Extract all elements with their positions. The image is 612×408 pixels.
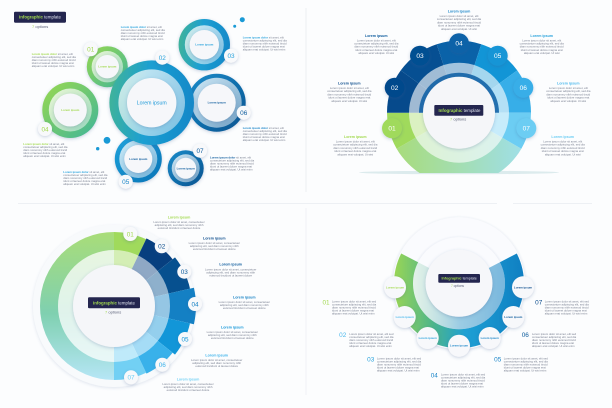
text 07: aliquam erat volutpat. Ut wisi enim [210, 168, 253, 172]
text 03: consectetuer adipiscing elit, sed dia [243, 38, 287, 42]
text 06: aliquam erat volutpat. Ut wisi [550, 99, 587, 103]
text 02: Lorem ipsum [338, 82, 361, 86]
text 06: Lorem ipsum dolor sit amet, elit [549, 86, 588, 90]
text 02: euismod tincidunt ut laoreet dolore [193, 247, 236, 251]
item 07: aliquam erat volutpat. Ut wisi enim [545, 312, 588, 316]
number badges: 01 [127, 231, 134, 238]
text 06 [191, 354, 242, 368]
bubbles: Lorem ipsum [419, 336, 437, 340]
center disc [73, 265, 155, 347]
item 03: aliquam erat volutpat. Ut wisi enim [377, 369, 420, 373]
text 07: diam nonummy nibh euismod tincid [210, 162, 254, 166]
text 05: Lorem ipsum dolor sit amet, consectetuer [207, 330, 258, 334]
number badges: 03 [227, 53, 235, 60]
number badges: 07 [127, 375, 135, 382]
circle 07: Lorem ipsum [177, 166, 195, 170]
text 04: Lorem ipsum [233, 295, 256, 299]
text 05: idunt ut laoreet dolore magna erat [63, 179, 106, 183]
title label [438, 274, 480, 283]
item 02 [339, 332, 394, 348]
text 01: consectetuer adipiscing elit, sed dia [32, 55, 76, 59]
text 07: Lorem ipsum dolor sit amet, elit [543, 140, 582, 144]
decorative dots [96, 17, 245, 150]
text 03: Lorem ipsum [365, 34, 388, 38]
text 06: sit amet, elit [269, 126, 284, 130]
panel: bubble circles [14, 8, 592, 204]
item 06 [522, 332, 577, 348]
item 05: consectetuer adipiscing elit, sed dia [504, 360, 548, 364]
number bubbles: 02 [391, 85, 399, 92]
text 06 [546, 82, 591, 103]
circle 05 [115, 136, 162, 182]
bubbles: Lorem ipsum [450, 344, 469, 348]
text 02: consectetuer adipiscing elit, sed dia [121, 28, 165, 32]
number bubbles: 03 [416, 53, 424, 60]
item 01: diam nonummy nibh euismod tincid [332, 306, 376, 310]
text 02: idunt ut laoreet dolore magna erat [121, 34, 163, 38]
text 07: Lorem ipsum dolor sit amet, consectetuer [162, 382, 214, 386]
item 03: 03 [367, 357, 375, 364]
title label: Infographic template [442, 277, 477, 281]
item 01: 01 [322, 299, 330, 306]
text 07: aliquam erat volutpat. Ut wisi [545, 152, 581, 156]
text 03: euismod tincidunt ut laoreet dolore [209, 274, 253, 278]
text 05: aliquam erat volutpat. Ut wisi enim [63, 182, 107, 186]
text 01: diam nonummy nibh euismod tincid [32, 58, 76, 62]
number bubbles [382, 33, 536, 138]
options label: 7 options [451, 284, 464, 288]
item 07: idunt ut laoreet dolore magna erat [545, 308, 587, 312]
item 03: Lorem ipsum dolor sit amet, elit sed [377, 357, 422, 361]
text 01 [153, 215, 205, 230]
translucent inner band [413, 262, 505, 329]
text 02: Lorem ipsum [203, 236, 226, 240]
text 06: Lorem ipsum [557, 82, 580, 86]
number bubbles: 04 [455, 41, 463, 48]
text 03: adipiscing elit, sed diam nonummy nibh [206, 270, 256, 274]
text 04: idunt ut laoreet dolore magna erat [23, 151, 66, 155]
text 05: Lorem ipsum [221, 325, 244, 329]
text 01: idunt ut laoreet dolore magna erat [32, 61, 74, 65]
text 02: diam nonummy nibh euismod tincid [121, 31, 165, 35]
number badges [38, 42, 251, 189]
item 01: idunt ut laoreet dolore magna erat [332, 308, 374, 312]
text 05 [207, 325, 258, 340]
text 02: adipiscing elit, sed diam nonummy nibh [190, 244, 239, 248]
item 03: diam nonummy nibh euismod tincid [377, 363, 421, 367]
circle 03: Lorem ipsum [195, 43, 214, 47]
item 01: Lorem ipsum dolor sit amet, elit sed [332, 300, 377, 304]
number badges: 03 [181, 269, 188, 276]
bubbles: Lorem ipsum [514, 285, 533, 289]
text 03: Lorem ipsum dolor sit amet, elit [357, 38, 396, 42]
wheel center disc [423, 77, 495, 149]
bubbles: Lorem ipsum [481, 336, 499, 340]
text 04 [437, 10, 482, 31]
wheel segments [387, 41, 531, 185]
text 07: consectetuer adipiscing elit, sed dia [541, 143, 585, 147]
translucent ring left [58, 250, 114, 362]
text 07: idunt ut laoreet dolore magna erat [542, 149, 584, 153]
item 06: Lorem ipsum dolor sit amet, elit sed [532, 332, 577, 336]
text 04 [219, 295, 270, 310]
text 04: sit amet, elit [49, 142, 64, 146]
item 04: consectetuer adipiscing elit, sed dia [441, 376, 486, 380]
item 02: 02 [339, 332, 347, 339]
item 04 [431, 372, 486, 389]
title label [434, 105, 483, 116]
circle 05: Lorem ipsum [129, 157, 148, 161]
vertical divider [305, 208, 307, 395]
text 01: Lorem ipsum [168, 215, 190, 219]
item 06: idunt ut laoreet dolore magna erat [532, 341, 574, 345]
faint mid disc [413, 237, 505, 329]
text 05: consectetuer adipiscing elit, sed dia [63, 173, 108, 177]
text 01: sit amet, elit [58, 52, 73, 56]
text 05 [520, 34, 564, 55]
text 05: Lorem ipsum dolor sit amet, elit [522, 38, 561, 42]
text 05: consectetuer adipiscing elit, sed dia [520, 42, 564, 46]
text 07: euismod tincidunt ut laoreet dolore [167, 388, 210, 392]
faint outer halo [33, 225, 195, 387]
number badges: 01 [87, 47, 95, 54]
number badges: 04 [41, 126, 49, 133]
translucent ring right [58, 250, 170, 362]
item 07: diam nonummy nibh euismod tincid [545, 306, 589, 310]
text 01: Lorem ipsum [344, 135, 367, 139]
text 03: idunt ut laoreet dolore magna erat [243, 44, 285, 48]
item 01: consectetuer adipiscing elit, sed dia [332, 302, 377, 306]
text 07: sit amet, elit [236, 156, 251, 160]
text 02: aliquam erat volutpat. Ut wisi enim [121, 37, 164, 41]
text 04: consectetuer adipiscing elit, sed dia [437, 17, 482, 21]
text 04: diam nonummy nibh euismod tincid [23, 148, 68, 152]
text 01: euismod tincidunt ut laoreet dolore [158, 226, 201, 230]
item 03: consectetuer adipiscing elit, sed dia [377, 360, 422, 364]
text 03: aliquam erat volutpat. Ut wisi [358, 51, 395, 55]
panel: arc with bubbles [306, 208, 589, 395]
number bubbles: 05 [494, 53, 502, 60]
center disc [426, 250, 492, 317]
item 05: Lorem ipsum dolor sit amet, elit sed [504, 357, 548, 361]
number badges: 07 [196, 148, 204, 155]
panel divider lines [18, 8, 592, 204]
bubbles: Lorem ipsum [396, 315, 414, 319]
text 04: adipiscing elit, sed diam nonummy nibh [220, 303, 269, 307]
circle 03 [179, 19, 230, 70]
faint outer disc [393, 217, 525, 349]
text 05: aliquam erat volutpat. Ut wisi [524, 51, 560, 55]
text 03: diam nonummy nibh euismod tincid [243, 42, 287, 46]
text 07: diam nonummy nibh euismod tincid [541, 146, 585, 150]
circle 07 [168, 150, 204, 186]
wheel translucent ring [409, 63, 509, 163]
text 02 [189, 236, 240, 251]
text 02 [327, 82, 372, 103]
item 04: Lorem ipsum dolor sit amet, elit sed [441, 373, 486, 377]
text 07: adipiscing elit, sed diam nonummy nibh [164, 385, 213, 389]
text 02: diam nonummy nibh euismod tincid [327, 92, 372, 96]
circle 04 [42, 82, 98, 138]
item 05: 05 [494, 357, 502, 364]
text 02: Lorem ipsum dolor sit amet, elit [330, 86, 369, 90]
text 06: idunt ut laoreet dolore magna erat [243, 135, 285, 139]
text 06: Lorem ipsum [205, 354, 228, 358]
item 04: diam nonummy nibh euismod tincid [441, 379, 485, 383]
text 01: consectetuer adipiscing elit, sed dia [333, 143, 378, 147]
text 07: Lorem ipsum dolor [210, 156, 236, 160]
item 02: idunt ut laoreet dolore magna erat [349, 341, 392, 345]
options label: 7 options [450, 116, 466, 122]
text 06: diam nonummy nibh euismod tincid [243, 132, 287, 136]
text 05: adipiscing elit, sed diam nonummy nibh [208, 333, 257, 337]
number badges [123, 227, 202, 384]
text 07: consectetuer adipiscing elit, sed dia [210, 158, 255, 162]
text 01: aliquam erat volutpat. Ut wisi enim [32, 64, 75, 68]
circle 06: Lorem ipsum [208, 101, 226, 105]
text 04: idunt ut laoreet dolore magna erat [438, 24, 480, 28]
text 03: consectetuer adipiscing elit, sed dia [354, 42, 399, 46]
item 07 [535, 299, 589, 316]
item 04: aliquam erat volutpat. Ut wisi enim [441, 385, 484, 389]
text 03: diam nonummy nibh euismod tincid [354, 45, 399, 49]
text 04: consectetuer adipiscing elit, sed dia [23, 145, 68, 149]
text 07 [541, 135, 585, 156]
left half gradient [40, 232, 114, 380]
title label [14, 12, 66, 23]
item 03: idunt ut laoreet dolore magna erat [377, 366, 419, 370]
text 04: aliquam erat volutpat. Ut wisi enim [23, 154, 67, 158]
number bubbles: 01 [388, 126, 396, 133]
text 02: consectetuer adipiscing elit, sed dia [327, 89, 372, 93]
item 01 [322, 299, 377, 316]
text 01: adipiscing elit, sed diam nonummy nibh [155, 223, 204, 227]
text 04: Lorem ipsum dolor sit amet, elit [440, 14, 479, 18]
number badges: 05 [122, 179, 130, 186]
number badges: 06 [240, 110, 248, 117]
text 04: euismod tincidunt ut laoreet dolore [223, 306, 266, 310]
number bubbles: 06 [520, 85, 527, 92]
circle 01 [87, 46, 128, 87]
item 02: aliquam erat volutpat. Ut wisi enim [349, 344, 393, 348]
item 07: 07 [535, 299, 543, 306]
text 02: Lorem ipsum dolor [121, 25, 147, 29]
circle 04: Lorem ipsum [61, 108, 80, 112]
text 03: Lorem ipsum dolor [243, 36, 269, 40]
title label [88, 297, 140, 308]
text 07 [162, 377, 214, 392]
item 01: aliquam erat volutpat. Ut wisi enim [332, 312, 375, 316]
text 03 [354, 34, 399, 55]
text 06: diam nonummy nibh euismod tincid [546, 92, 591, 96]
circle 06 [188, 74, 246, 132]
text 02: aliquam erat volutpat. Ut wisi [331, 99, 368, 103]
item 06: diam nonummy nibh euismod tincid [532, 338, 576, 342]
number badges: 02 [158, 244, 166, 251]
text 05: Lorem ipsum [530, 34, 553, 38]
fan segments [114, 232, 196, 380]
text 03: idunt ut laoreet dolore magna erat [355, 48, 398, 52]
text 04: Lorem ipsum [448, 10, 470, 14]
text 03: Lorem ipsum [219, 263, 242, 267]
text 01: diam nonummy nibh euismod tincid [333, 146, 378, 150]
text 06: Lorem ipsum dolor sit amet, consectetuer [191, 358, 242, 362]
item 06: aliquam erat volutpat. Ut wisi enim [532, 344, 575, 348]
text 05: diam nonummy nibh euismod tincid [63, 176, 108, 180]
item 05: diam nonummy nibh euismod tincid [504, 363, 548, 367]
text 04: diam nonummy nibh euismod tincid [437, 20, 481, 24]
bubbles: Lorem ipsum [386, 285, 405, 289]
wheel inner dark ring [419, 73, 499, 113]
number badges: 04 [191, 301, 199, 308]
text 03: Lorem ipsum dolor sit amet, consectetuer [205, 267, 256, 271]
item 03 [367, 357, 422, 373]
text 03: aliquam erat volutpat. Ut wisi enim [243, 48, 286, 52]
text 05: Lorem ipsum dolor [63, 170, 90, 174]
text 04: aliquam erat volutpat. Ut wisi [441, 27, 477, 31]
text 04: Lorem ipsum dolor [23, 142, 50, 146]
text 06: adipiscing elit, sed diam nonummy nibh [192, 361, 242, 365]
gradient band [394, 254, 524, 348]
text 01: idunt ut laoreet dolore magna erat [334, 149, 377, 153]
item 05: idunt ut laoreet dolore magna erat [504, 366, 546, 370]
item 05 [494, 357, 548, 373]
panel: fan chart [33, 215, 270, 392]
text 07: idunt ut laoreet dolore magna erat [210, 164, 252, 168]
text 02: idunt ut laoreet dolore magna erat [328, 96, 371, 100]
item 02: consectetuer adipiscing elit, sed dia [349, 335, 394, 339]
number badges: 02 [159, 55, 166, 62]
circle 02: Lorem ipsum [137, 100, 167, 106]
text 02: sit amet, elit [147, 25, 162, 29]
title label: Infographic template [93, 300, 136, 305]
text 05: idunt ut laoreet dolore magna erat [521, 48, 563, 52]
item 04: idunt ut laoreet dolore magna erat [441, 382, 483, 386]
options label: 7 options [105, 310, 121, 314]
text 06: consectetuer adipiscing elit, sed dia [243, 129, 287, 133]
text 05: diam nonummy nibh euismod tincid [520, 45, 564, 49]
number badges: 06 [159, 362, 166, 369]
text 01: Lorem ipsum dolor [32, 52, 58, 56]
item 06: consectetuer adipiscing elit, sed dia [532, 335, 577, 339]
item 04: 04 [431, 372, 438, 379]
panel: gear wheel [327, 10, 591, 185]
text 04: Lorem ipsum dolor sit amet, consectetuer [219, 300, 270, 304]
circle 02 [109, 60, 194, 145]
item 07: Lorem ipsum dolor sit amet, elit sed [545, 300, 589, 304]
text 03: sit amet, elit [269, 36, 284, 40]
text 06: idunt ut laoreet dolore magna erat [547, 96, 590, 100]
text 06: euismod tincidunt ut laoreet dolore [195, 364, 239, 368]
text 01: aliquam erat volutpat. Ut wisi [337, 152, 374, 156]
circle 01: Lorem ipsum [98, 65, 117, 69]
item 02: Lorem ipsum dolor sit amet, elit sed [349, 332, 394, 336]
text 01 [333, 135, 378, 156]
item 02: diam nonummy nibh euismod tincid [349, 338, 394, 342]
item 05: aliquam erat volutpat. Ut wisi enim [504, 369, 547, 373]
text 02: Lorem ipsum dolor sit amet, consectetuer [189, 241, 240, 245]
text 05: sit amet, elit [89, 170, 104, 174]
text 05: euismod tincidunt ut laoreet dolore [211, 336, 254, 340]
text 01: Lorem ipsum dolor sit amet, consectetuer [153, 220, 205, 224]
item 06: 06 [522, 332, 529, 339]
bubbles [384, 276, 534, 357]
ground shadow [359, 171, 559, 174]
number badges: 05 [181, 336, 189, 343]
text 01: Lorem ipsum dolor sit amet, elit [336, 140, 375, 144]
number bubbles: 07 [523, 126, 530, 133]
text 06: Lorem ipsum dolor [243, 126, 269, 130]
text 07: Lorem ipsum [177, 377, 199, 381]
options label: 7 options [32, 24, 48, 29]
text 03 [205, 263, 256, 278]
title label: Infographic template [438, 108, 481, 113]
text 06: aliquam erat volutpat. Ut wisi enim [243, 138, 286, 142]
bubbles: Lorem ipsum [504, 315, 523, 319]
item 07: consectetuer adipiscing elit, sed dia [545, 302, 589, 306]
text 07: Lorem ipsum [551, 135, 574, 139]
title label: Infographic template [19, 15, 62, 20]
text 06: consectetuer adipiscing elit, sed dia [546, 89, 591, 93]
